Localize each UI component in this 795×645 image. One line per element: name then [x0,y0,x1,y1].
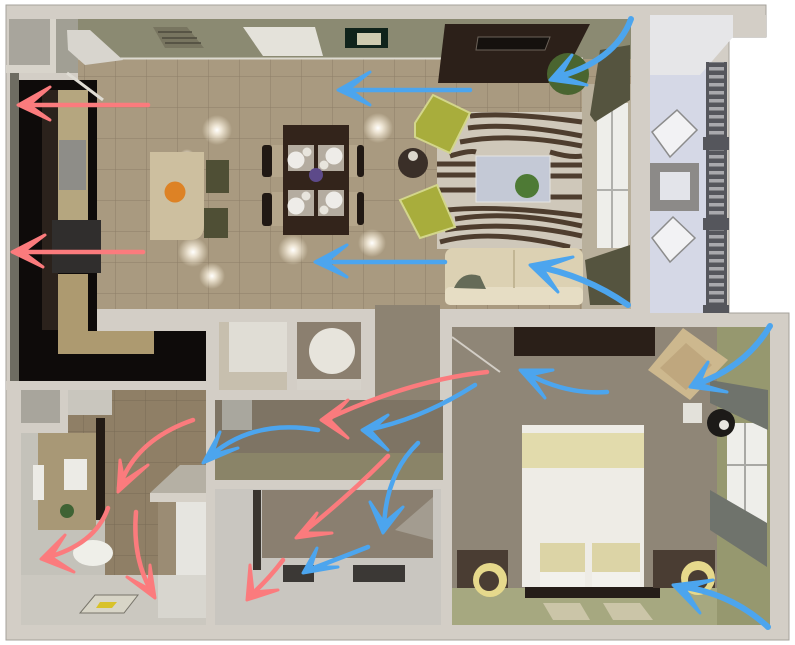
plant [547,53,589,95]
room: living and dining [56,19,631,309]
toilet [73,540,113,566]
range hood panel [67,30,123,100]
window [597,103,628,248]
zebra rug [437,112,582,249]
sinks [33,459,87,500]
balcony table [650,163,699,211]
room: walk-in closet [215,489,441,625]
arrow [118,420,193,492]
bedroom curtains [710,380,768,567]
floor lamp [707,409,735,437]
arrow [362,385,475,450]
floor frames [543,603,653,620]
side table [683,403,702,423]
room: bedroom [452,327,770,625]
bath mat [80,595,138,613]
bed [522,425,660,598]
armchairs [400,95,470,238]
room: upper hall [375,305,440,401]
arrow [127,512,155,598]
arrow [12,235,143,267]
arrow [303,547,368,573]
room: balcony [650,15,766,313]
sofa [445,248,583,305]
arrow [18,87,148,120]
closet door [452,337,500,372]
dresser [514,327,655,356]
balcony chairs [652,110,697,262]
airflow arrows: exhaust (red) [12,87,487,600]
arrow [203,427,318,463]
kitchen island [150,152,204,240]
vanity plant [60,504,74,518]
shower [150,465,206,618]
arrow [41,508,108,572]
bar stools [204,160,229,238]
arrow [247,560,283,600]
pantry top-left [6,19,78,73]
airflow arrows: fresh air (blue) [203,19,770,627]
dining chairs [262,145,364,226]
arrow [370,443,418,533]
room: laundry closet [206,309,375,400]
curtains upper [590,45,630,122]
accent chair [648,328,728,400]
side table [398,148,428,178]
arrow [550,19,631,85]
arrow [673,580,768,627]
shoes [283,565,405,582]
door [243,27,323,56]
arrow [530,257,628,305]
room: bathroom [6,381,206,625]
room: kitchen [6,19,229,381]
balcony railing [703,62,729,313]
room: hallway [215,400,443,480]
nightstands [457,550,715,597]
linen closet [21,390,112,433]
media console [438,24,590,83]
dining table [283,125,349,235]
coffee table [476,156,550,202]
arrow [296,456,388,538]
wall art [345,28,388,48]
arrow [690,326,770,392]
ceiling lights [178,113,393,289]
arrow [520,370,607,398]
bedroom window [727,423,767,523]
arrow [321,372,487,438]
arrow [315,245,445,277]
curtains lower [585,245,630,305]
arrow [338,72,470,105]
wall vent [153,27,204,48]
